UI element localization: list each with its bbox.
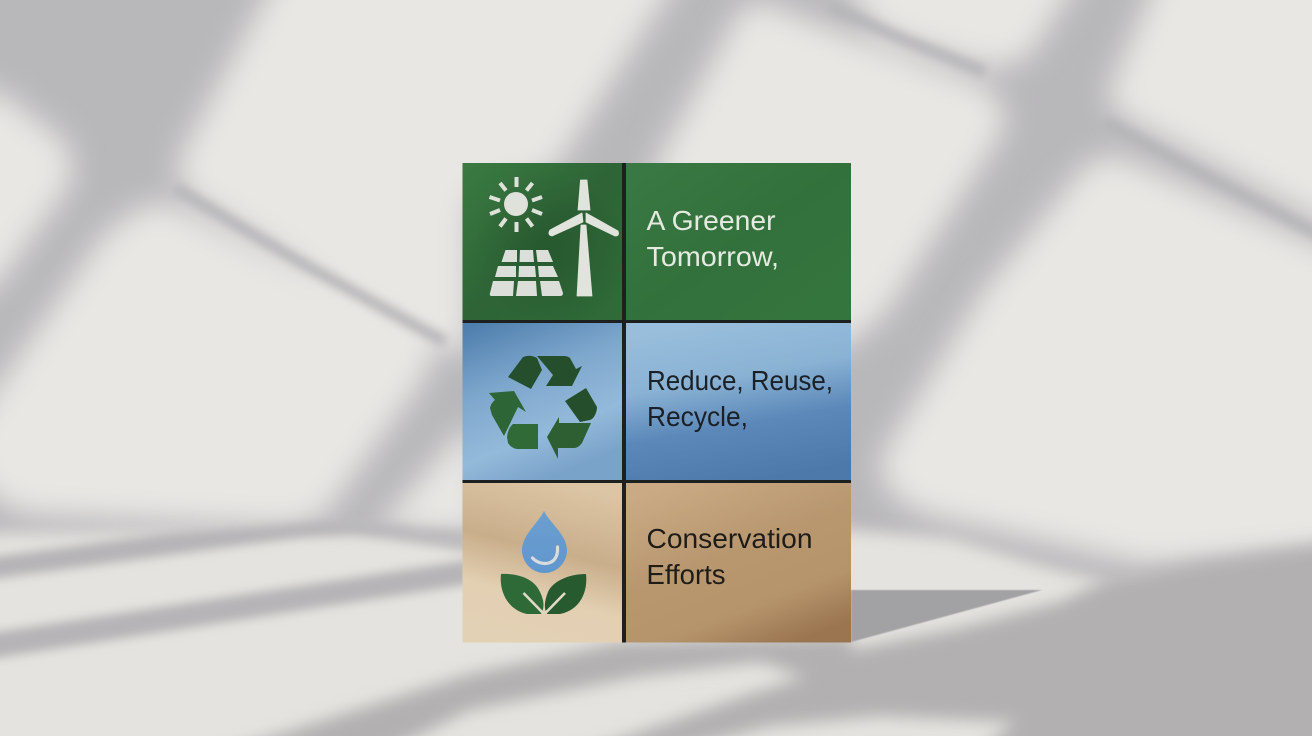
heading: Reduce, Reuse, Recycle: Recycle,: [647, 401, 748, 432]
icon: water drop: [522, 511, 567, 573]
heading: Conservation Efforts: Conservation: [646, 523, 812, 554]
icon: recycle arrows: [489, 356, 597, 459]
icon: solar panel: [490, 250, 563, 296]
panel: blue icon: [462, 323, 622, 480]
heading: A Greener Tomorrow: [646, 205, 779, 272]
panel: tan icon: [462, 483, 622, 642]
heading: Conservation Efforts: Efforts: [646, 559, 726, 590]
panel: blue title: [626, 323, 851, 480]
heading: Conservation Efforts: [646, 523, 812, 590]
signboard: [462, 163, 851, 642]
icon: wind turbine: [549, 180, 619, 296]
heading: A Greener Tomorrow: A Greener: [646, 205, 776, 236]
icon: sun: [490, 177, 542, 232]
heading: Reduce, Reuse, Recycle: Reduce, Reuse,: [647, 365, 833, 396]
heading: A Greener Tomorrow: Tomorrow,: [646, 241, 779, 272]
panel: tan title: [626, 483, 851, 642]
panel shadow on floor: [851, 590, 1042, 642]
background: floor with light stripes: [0, 522, 1312, 736]
panel: green icon: [462, 163, 622, 320]
icon: leaves: [501, 574, 586, 614]
heading: Reduce, Reuse, Recycle: [647, 365, 833, 432]
panel: green title: [626, 163, 851, 320]
